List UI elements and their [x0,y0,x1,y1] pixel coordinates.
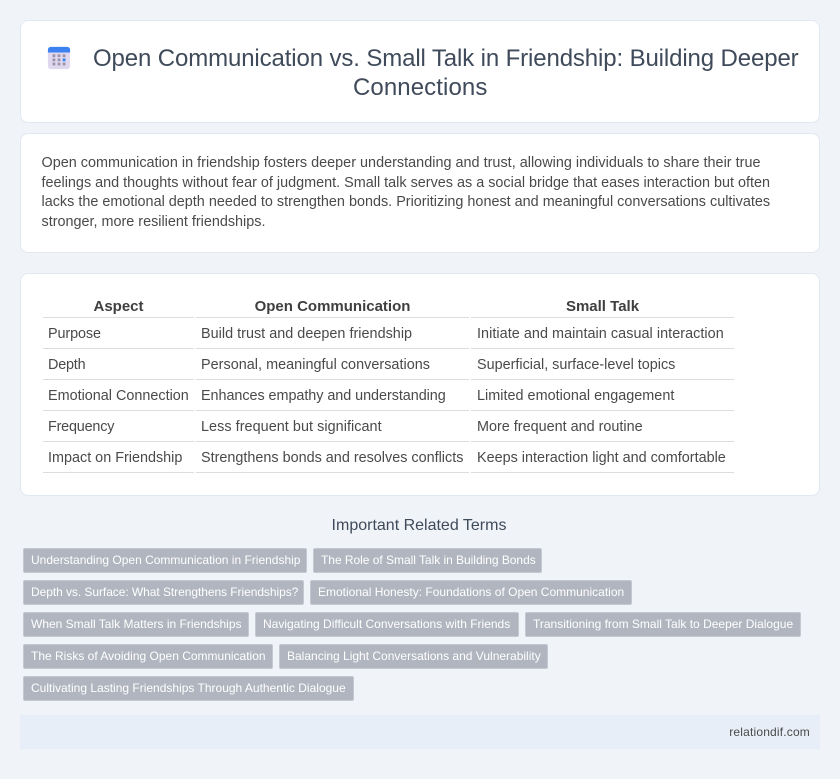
intro text [42,155,770,230]
table rows: Personal, meaningful conversations [201,357,430,373]
table header [93,298,639,315]
related term tags: Transitioning from Small Talk to Deeper Dialogue [533,617,793,631]
table rows: Build trust and deepen friendship [201,326,412,342]
intro text: Open communication in friendship fosters deeper understanding and trust, allowing individuals to share their true [42,155,761,171]
table header: Aspect [93,298,144,315]
table rows: Limited emotional engagement [477,388,674,404]
panel: title card [20,20,820,123]
related term tags: Cultivating Lasting Friendships Through Authentic Dialogue [31,681,346,695]
table rows: More frequent and routine [477,419,643,435]
intro text: feelings and thoughts without fear of judgment. Small talk serves as a social bridge that eases interaction but often [42,175,770,191]
table header: Small Talk [566,298,639,315]
heading: related terms: Important Related Terms [332,517,506,534]
table rows: Emotional Connection [48,388,189,404]
table rows: Impact on Friendship [48,450,182,466]
related term tags: Balancing Light Conversations and Vulnerability [287,649,541,663]
related term tags: Navigating Difficult Conversations with Friends [263,617,510,631]
icon: calendar [48,46,70,70]
related term tags [23,548,801,701]
table rows: Initiate and maintain casual interaction [477,326,724,342]
table rows: Frequency [48,419,114,435]
table header: Open Communication [255,298,410,315]
table rows: Keeps interaction light and comfortable [477,450,726,466]
related term tags: Emotional Honesty: Foundations of Open Communication [318,585,624,599]
panel: comparison table [20,273,820,496]
related term tags: When Small Talk Matters in Friendships [31,617,242,631]
related term tags: The Role of Small Talk in Building Bonds [321,553,536,567]
intro text: stronger, more resilient friendships. [42,214,265,230]
table rows: Purpose [48,326,101,342]
source label: relationdif.com [729,725,810,739]
panel: introduction [20,133,820,253]
footer bar [20,715,820,749]
table rows [43,317,734,473]
table rows: Strengthens bonds and resolves conflicts [201,450,463,466]
related term tags: The Risks of Avoiding Open Communication [31,649,266,663]
intro text: lacks the emotional depth needed to strengthen bonds. Prioritizing honest and meaningful conversations cultivates [42,194,770,210]
related term tags: Depth vs. Surface: What Strengthens Friendships? [31,585,298,599]
title: Connections [353,74,487,101]
table rows: Enhances empathy and understanding [201,388,446,404]
title: Open Communication vs. Small Talk in Friendship: Building Deeper [93,45,799,72]
table rows: Depth [48,357,85,373]
title [93,45,799,101]
table rows: Less frequent but significant [201,419,382,435]
related term tags: Understanding Open Communication in Friendship [31,553,300,567]
table rows: Superficial, surface-level topics [477,357,675,373]
